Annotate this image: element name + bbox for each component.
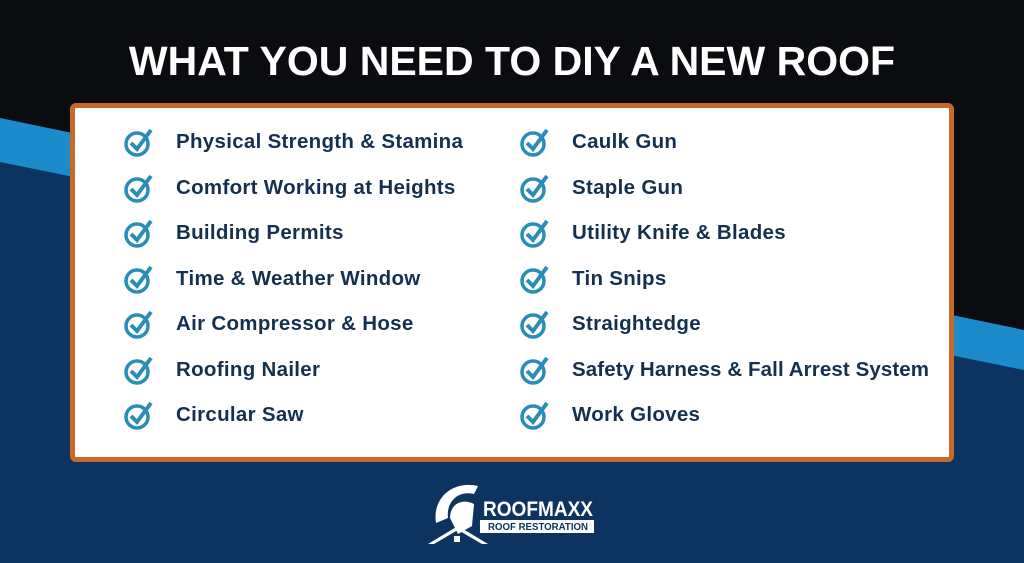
item [520,128,677,157]
item [124,220,344,248]
item: Work Gloves [572,403,700,426]
item: Tin Snips [572,267,667,290]
item: Air Compressor & Hose [176,312,414,335]
item [124,402,304,430]
title: WHAT YOU NEED TO DIY A NEW ROOF [129,38,895,84]
item: Staple Gun [572,176,683,199]
item: Roofing Nailer [176,358,320,381]
item: Safety Harness & Fall Arrest System [572,358,929,381]
item: Utility Knife & Blades [572,221,786,244]
brand text: ROOF RESTORATION [488,522,588,533]
item: Building Permits [176,221,344,244]
item [520,174,683,203]
item: Caulk Gun [572,130,677,153]
item: Physical Strength & Stamina [176,130,463,153]
icon: helmet [428,485,488,544]
logo [428,484,594,544]
item [124,174,456,203]
item [520,310,701,339]
item: Straightedge [572,312,701,335]
panel: checklist [70,103,954,462]
brand text [480,498,594,533]
item: Comfort Working at Heights [176,176,456,199]
item [124,356,320,385]
item: Time & Weather Window [176,267,421,290]
item: Circular Saw [176,403,304,426]
item [520,266,667,294]
item [520,402,700,430]
item [124,128,464,157]
item [124,266,421,294]
item [520,220,786,248]
item [124,310,414,339]
